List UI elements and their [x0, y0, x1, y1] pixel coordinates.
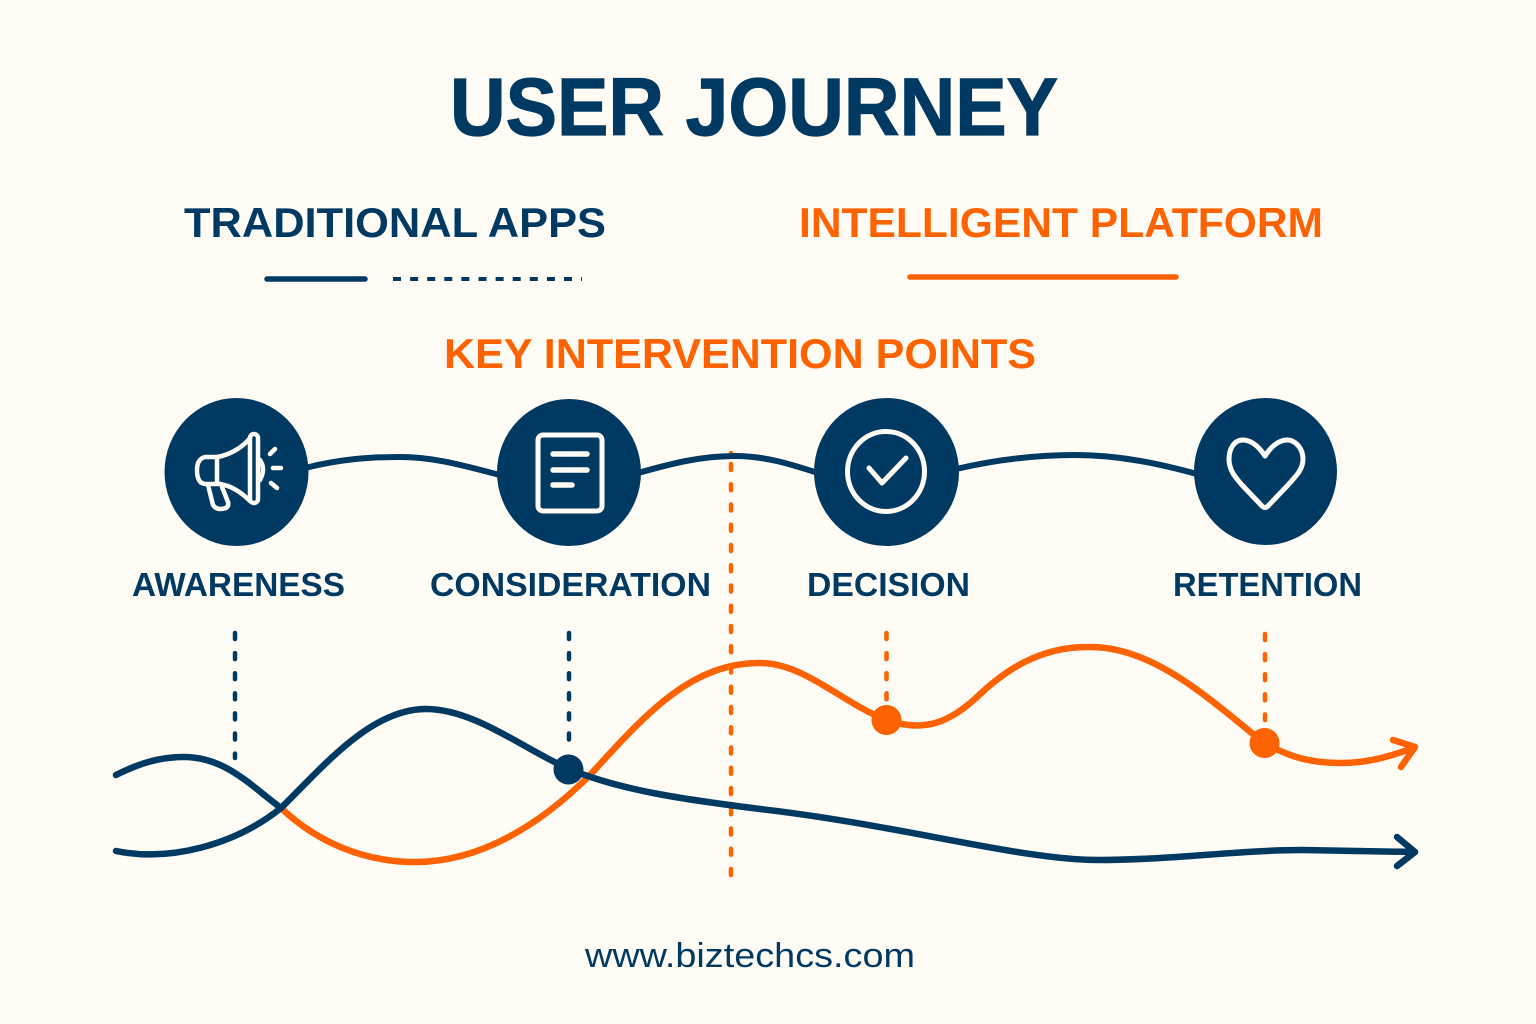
marker: retention: [1250, 728, 1280, 758]
legend solid navy line: [267, 276, 365, 282]
label: decision: DECISION: [807, 566, 970, 603]
navy curve: traditional apps: [116, 709, 1415, 866]
stage: retention: [1173, 398, 1362, 603]
icon: document: [538, 435, 602, 511]
icon: megaphone: [197, 434, 281, 509]
title: USER JOURNEY: [450, 62, 1058, 153]
marker: decision: [872, 705, 902, 735]
heading: intelligent platform: INTELLIGENT PLATFORM: [799, 199, 1323, 246]
stage: decision: [807, 398, 970, 603]
central orange dashed divider: [729, 453, 733, 876]
stage: consideration: [430, 399, 711, 603]
stage connector lines: [305, 455, 1197, 475]
legend dashed navy line: [393, 277, 582, 281]
marker: consideration: [554, 754, 584, 784]
dashed drop line: decision: [884, 633, 889, 700]
decision circle: [814, 398, 959, 546]
consideration circle: [497, 399, 641, 546]
stage: awareness: [132, 398, 345, 603]
heading: traditional apps: TRADITIONAL APPS: [184, 199, 606, 246]
legend solid orange line: [910, 274, 1176, 280]
icon: check in circle: [848, 432, 924, 512]
awareness circle: [164, 398, 308, 546]
orange arrowhead: [1393, 740, 1415, 767]
orange curve: intelligent platform: [281, 647, 1415, 862]
label: retention: RETENTION: [1173, 566, 1362, 603]
heading: key intervention points: KEY INTERVENTION POINTS: [444, 330, 1036, 377]
dashed drop line: awareness: [233, 633, 237, 758]
navy arrowhead: [1397, 837, 1415, 866]
dashed drop line: retention: [1263, 634, 1267, 720]
website url: www.biztechcs.com: [584, 937, 915, 975]
dashed drop line: consideration: [567, 633, 571, 740]
label: awareness: AWARENESS: [132, 566, 345, 603]
label: consideration: CONSIDERATION: [430, 566, 711, 603]
retention circle: [1194, 398, 1337, 545]
icon: heart: [1229, 440, 1303, 508]
